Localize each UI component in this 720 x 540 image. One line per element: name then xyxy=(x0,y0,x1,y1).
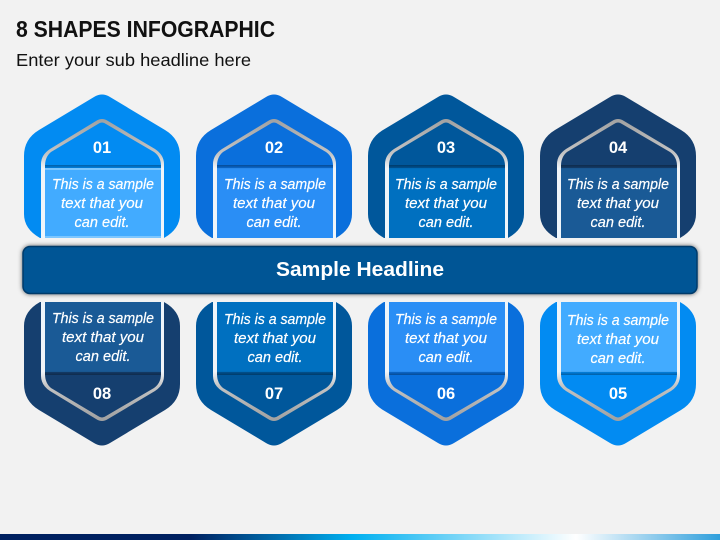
shape 03: text that you xyxy=(405,195,488,212)
shape 07: can edit. xyxy=(248,349,302,366)
shape 01: text that you xyxy=(61,195,144,212)
shape 06: 06 xyxy=(437,385,455,403)
shape 05: 05 xyxy=(609,385,627,403)
shape 08 xyxy=(24,302,180,446)
shape 04: 04 xyxy=(609,139,628,157)
shape 03: 03 xyxy=(437,139,455,157)
shape 08: 08 xyxy=(93,385,111,403)
shape 08: can edit. xyxy=(76,348,130,365)
headline bar: Sample Headline xyxy=(276,259,444,281)
shape 05: text that you xyxy=(577,331,660,348)
shape 04 xyxy=(540,94,696,238)
shape 07: text that you xyxy=(234,330,317,347)
shape 05: This is a sample xyxy=(567,312,669,329)
shape 01: 01 xyxy=(93,139,111,157)
shape 02: This is a sample xyxy=(224,176,326,193)
shape 02: text that you xyxy=(233,195,316,212)
subtitle: Enter your sub headline here xyxy=(16,50,251,70)
shape 02: 02 xyxy=(265,139,283,157)
shape 04: text that you xyxy=(577,195,660,212)
shape 02: can edit. xyxy=(246,214,302,231)
shape 07 xyxy=(196,302,352,446)
title: 8 SHAPES INFOGRAPHIC xyxy=(16,16,275,42)
shape 04: This is a sample xyxy=(567,176,669,193)
shape 03: This is a sample xyxy=(395,176,497,193)
shape 02 xyxy=(196,94,352,238)
shape 07: This is a sample xyxy=(224,311,326,328)
shape 08: This is a sample xyxy=(52,310,154,327)
shape 01: can edit. xyxy=(74,214,130,231)
shape 01 xyxy=(24,94,180,238)
shape 06: This is a sample xyxy=(395,311,497,328)
shape 06 xyxy=(368,302,524,446)
shape 06: text that you xyxy=(405,330,488,347)
shape 04: can edit. xyxy=(590,214,646,231)
bottom gradient strip xyxy=(0,534,720,540)
shape 07: 07 xyxy=(265,385,283,403)
shape 03: can edit. xyxy=(418,214,474,231)
shape 05: can edit. xyxy=(590,350,646,367)
shape 06: can edit. xyxy=(418,349,474,366)
headline bar xyxy=(23,246,697,294)
shape 03 xyxy=(368,94,524,238)
shape 01: This is a sample xyxy=(52,176,154,193)
shape 05 xyxy=(540,302,696,446)
shape 08: text that you xyxy=(62,329,145,346)
